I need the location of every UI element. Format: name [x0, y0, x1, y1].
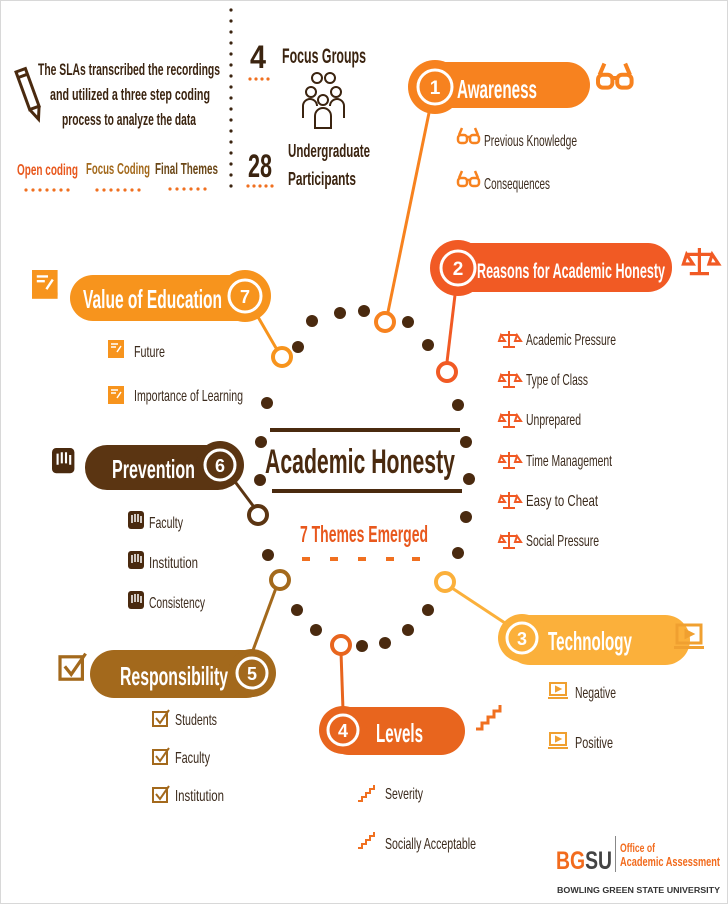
method text: The SLAs transcribed the recordings — [38, 60, 220, 79]
theme 4: Levels — [319, 705, 500, 853]
method text — [38, 60, 220, 129]
theme 3: Technology — [498, 614, 704, 752]
theme 2: Reasons: Time Management — [526, 453, 612, 470]
theme 5: Responsibility: 5 — [247, 664, 257, 684]
logo: BGSU Office of Academic Assessment: BGSU — [556, 847, 612, 875]
center title — [265, 428, 462, 561]
theme 7: Value of Education: Importance of Learning — [134, 388, 243, 405]
theme 6: Prevention: 6 — [215, 456, 225, 476]
center title: Academic Honesty — [265, 443, 455, 481]
ring nodes — [249, 313, 456, 654]
theme 2: Reasons — [430, 240, 719, 550]
stats: Undergraduate — [288, 141, 370, 161]
theme 1: Awareness: 1 — [430, 78, 441, 99]
theme 7: Value of Education: Future — [134, 344, 165, 361]
theme 3: Technology: 3 — [517, 629, 527, 649]
icon: group of people — [303, 73, 344, 128]
theme 5: Responsibility: Faculty — [175, 750, 210, 767]
stats: 4 — [250, 39, 266, 75]
theme 2: Reasons: Unprepared — [526, 412, 581, 429]
method text: process to analyze the data — [62, 110, 196, 129]
theme 6: Prevention: Consistency — [149, 595, 205, 612]
theme 2: Reasons: 2 — [453, 259, 463, 280]
intro: pencil and method text — [16, 60, 220, 192]
coding steps: Focus Coding — [86, 161, 150, 178]
divider dots — [229, 8, 233, 188]
theme 6: Prevention: Prevention — [112, 454, 195, 484]
connector lines — [230, 108, 520, 710]
theme 4: Levels: Severity — [385, 786, 423, 803]
theme 2: Reasons: Easy to Cheat — [526, 493, 598, 510]
coding steps: Final Themes — [155, 161, 218, 178]
theme 2: Reasons: Social Pressure — [526, 533, 599, 550]
method text: and utilized a three step coding — [50, 85, 210, 104]
stats: Participants — [288, 169, 356, 189]
theme 5: Responsibility: Responsibility — [120, 661, 228, 691]
theme 2: Reasons: Academic Pressure — [526, 332, 616, 349]
coding steps — [17, 161, 218, 192]
theme 3: Technology: Negative — [575, 685, 616, 702]
logo: BGSU Office of Academic Assessment — [556, 836, 721, 895]
theme 1: Awareness: Awareness — [457, 74, 537, 104]
theme 1: Awareness: Consequences — [484, 176, 550, 193]
stats: Focus Groups — [282, 45, 366, 68]
theme 6: Prevention: Institution — [149, 555, 198, 572]
dotted circle — [254, 305, 475, 652]
logo: BGSU Office of Academic Assessment: BOWLING GREEN STATE UNIVERSITY — [557, 886, 721, 895]
logo: BGSU Office of Academic Assessment: Office of — [620, 841, 656, 855]
theme 4: Levels: Socially Acceptable — [385, 836, 476, 853]
theme 4: Levels: 4 — [338, 721, 348, 741]
theme 4: Levels: Levels — [376, 718, 423, 748]
theme 3: Technology: Technology — [548, 626, 632, 656]
theme 3: Technology: Positive — [575, 735, 613, 752]
theme 7: Value of Education: Value of Education — [83, 284, 222, 314]
theme 5: Responsibility: Students — [175, 712, 217, 729]
theme 1: Awareness — [408, 60, 632, 193]
theme 7: Value of Education: 7 — [240, 287, 250, 307]
stats — [246, 39, 370, 189]
center title: 7 Themes Emerged — [300, 521, 428, 547]
theme 2: Reasons: Type of Class — [526, 372, 588, 389]
stats: 28 — [248, 148, 272, 184]
icon: pencil — [16, 69, 43, 121]
theme 1: Awareness: Previous Knowledge — [484, 133, 577, 150]
theme 7: Value of Education — [32, 270, 271, 405]
coding steps: Open coding — [17, 162, 78, 179]
theme 5: Responsibility — [60, 649, 276, 805]
theme 6: Prevention: Faculty — [149, 515, 183, 532]
theme 6: Prevention — [52, 441, 244, 612]
theme 5: Responsibility: Institution — [175, 788, 224, 805]
